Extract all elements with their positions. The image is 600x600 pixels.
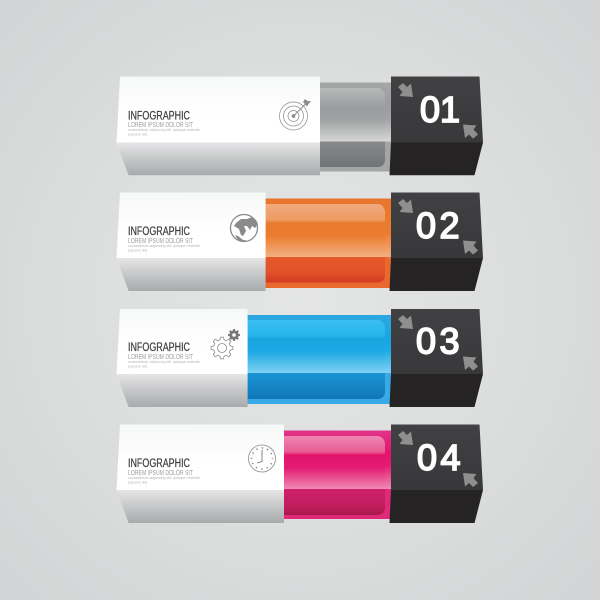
number: 01 xyxy=(420,89,460,130)
arrow: bottom-right xyxy=(463,124,478,138)
body text: consectetuer adipiscing elit, quisque molestie xyxy=(128,128,200,132)
body text xyxy=(128,128,200,136)
arrow: top-left xyxy=(398,431,413,445)
body text: posuere nisl. xyxy=(128,248,148,252)
body text xyxy=(128,360,200,368)
bar: blue xyxy=(230,315,392,404)
arrow: bottom-right xyxy=(463,356,478,370)
row 4 xyxy=(116,424,483,523)
icon: clock xyxy=(248,445,276,472)
arrow: top-left xyxy=(398,199,413,213)
subheading: LOREM IPSUM DOLOR SIT xyxy=(128,352,193,361)
body text: posuere nisl. xyxy=(128,132,148,136)
row 3 xyxy=(116,309,483,407)
body text: consectetuer adipiscing elit, quisque molestie xyxy=(128,360,200,364)
body text: posuere nisl. xyxy=(128,480,148,484)
bar: pink xyxy=(270,430,392,519)
arrow: bottom-right xyxy=(463,240,478,254)
body text xyxy=(128,476,200,484)
heading: INFOGRAPHIC xyxy=(128,458,190,470)
subheading: LOREM IPSUM DOLOR SIT xyxy=(128,120,193,129)
subheading: LOREM IPSUM DOLOR SIT xyxy=(128,236,193,245)
arrow: top-left xyxy=(398,83,413,97)
block: number 03 xyxy=(390,309,483,407)
body text: consectetuer adipiscing elit, quisque molestie xyxy=(128,244,200,248)
icon: gears xyxy=(211,329,240,359)
heading: INFOGRAPHIC xyxy=(128,342,190,354)
body text: posuere nisl. xyxy=(128,364,148,368)
body text xyxy=(128,244,200,252)
box: white sleeve xyxy=(116,424,284,523)
icon: target xyxy=(280,99,311,130)
icon: globe xyxy=(230,214,258,242)
heading: INFOGRAPHIC xyxy=(128,110,190,122)
row 1 xyxy=(116,76,483,175)
arrow: top-left xyxy=(398,315,413,329)
body text: consectetuer adipiscing elit, quisque molestie xyxy=(128,476,200,480)
box: white sleeve xyxy=(116,192,266,291)
number: 03 xyxy=(416,320,463,362)
box: white sleeve xyxy=(116,309,248,407)
number: 04 xyxy=(417,437,464,478)
block: number 04 xyxy=(390,424,483,523)
bar: orange xyxy=(250,198,392,288)
bar: grey xyxy=(300,82,392,172)
row 2 xyxy=(116,192,483,291)
block: number 01 xyxy=(390,76,483,175)
arrow: bottom-right xyxy=(463,473,478,487)
box: white sleeve xyxy=(116,76,320,175)
heading: INFOGRAPHIC xyxy=(128,226,190,238)
subheading: LOREM IPSUM DOLOR SIT xyxy=(128,468,193,477)
block: number 02 xyxy=(390,192,483,291)
number: 02 xyxy=(416,205,463,246)
